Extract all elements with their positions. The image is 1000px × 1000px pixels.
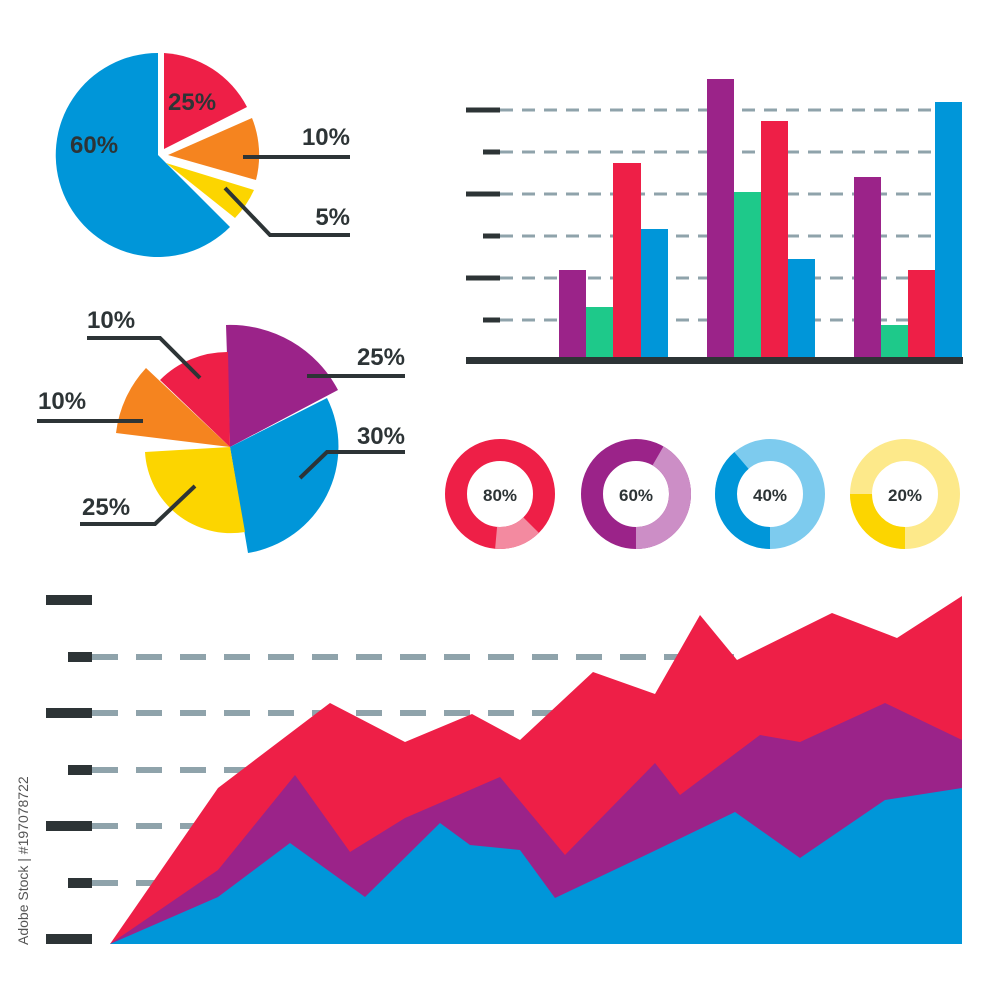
pie chart 1 [56, 53, 350, 257]
donut 60%: 60% [619, 486, 653, 505]
donut 80% [438, 432, 562, 556]
pie chart 1: 5% [315, 204, 350, 231]
donut 40% [726, 450, 814, 538]
pie chart 2: 25% [357, 344, 405, 371]
area chart [46, 596, 962, 944]
donut 60% [576, 434, 696, 554]
pie chart 2: 10% [87, 307, 135, 334]
bar chart [466, 79, 963, 364]
donut 80%: 80% [483, 486, 517, 505]
pie chart 1: 10% [302, 124, 350, 151]
pie chart 1: 25% [168, 89, 216, 116]
donut 20% [861, 450, 949, 538]
pie chart 2: 10% [38, 388, 86, 415]
pie chart 1: 60% [70, 132, 118, 159]
donut 20%: 20% [888, 486, 922, 505]
pie chart 2: 30% [357, 423, 405, 450]
donut 40%: 40% [753, 486, 787, 505]
pie chart 2: 25% [82, 494, 130, 521]
pie chart 2 [37, 307, 405, 553]
watermark text: Adobe Stock | #197078722 [15, 776, 31, 945]
